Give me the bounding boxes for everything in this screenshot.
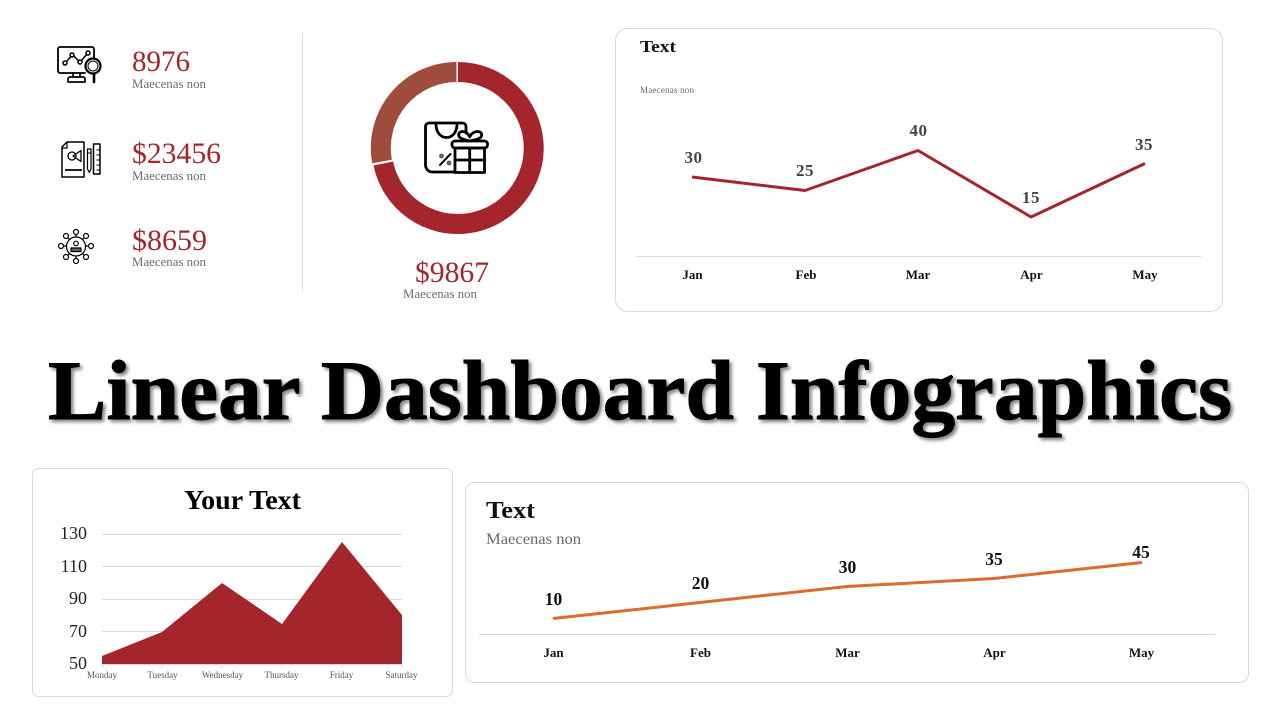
data labels: 20: [692, 573, 710, 593]
metric: $23456: Maecenas non: [132, 169, 207, 183]
x axis labels: Thursday: [264, 670, 299, 680]
month labels: [543, 645, 1155, 660]
heading: Text: [486, 498, 535, 524]
month labels: Mar: [835, 645, 860, 660]
card frame: [466, 482, 1248, 682]
data labels: [684, 121, 1153, 207]
data labels: 25: [796, 161, 814, 180]
donut ring: [381, 72, 534, 224]
month labels: Mar: [906, 267, 930, 282]
title: Linear Dashboard Infographics: [48, 344, 1232, 438]
data labels: 40: [910, 121, 928, 140]
data labels: 35: [985, 549, 1003, 569]
icon: monitor analytics: [58, 47, 100, 82]
month labels: May: [1132, 267, 1158, 282]
icon: document and ruler: [62, 142, 100, 177]
icon: people network: [58, 230, 94, 264]
x axis labels: Monday: [87, 670, 117, 680]
data labels: 35: [1135, 135, 1153, 154]
month labels: Feb: [690, 645, 711, 660]
x axis labels: [87, 670, 418, 680]
sub caption: Maecenas non: [486, 531, 581, 548]
y axis labels: 70: [69, 621, 87, 641]
y axis labels: 50: [69, 653, 87, 673]
metric: $8659: Maecenas non: [132, 255, 207, 269]
month labels: [682, 267, 1158, 282]
data labels: 30: [839, 557, 856, 577]
card frame: [616, 28, 1222, 312]
metric: $8659: $8659: [132, 224, 207, 257]
line series: [692, 150, 1145, 217]
metric: $23456: $23456: [132, 137, 221, 170]
month labels: Feb: [796, 267, 816, 282]
y axis labels: 130: [60, 523, 87, 543]
sub caption: Maecenas non: [640, 85, 694, 95]
divider: [302, 33, 304, 291]
month labels: Apr: [983, 645, 1006, 660]
month labels: Jan: [543, 645, 564, 660]
panel: bottom line chart: [466, 482, 1248, 682]
donut value: $9867: [415, 256, 489, 289]
card frame: [32, 468, 452, 696]
icon: shopping bag and gift: [426, 123, 488, 172]
panel: KPI list: [58, 45, 221, 269]
panel: top line chart: [616, 28, 1222, 312]
month labels: Jan: [682, 267, 703, 282]
data labels: 15: [1022, 188, 1040, 207]
panel: area chart: [32, 468, 452, 696]
line series: [553, 562, 1142, 618]
month labels: May: [1129, 645, 1155, 660]
x axis labels: Wednesday: [202, 670, 244, 680]
data labels: [545, 542, 1150, 609]
area series: [102, 542, 402, 664]
heading: Text: [640, 37, 676, 56]
heading: Your Text: [184, 485, 301, 515]
metric: 8976: [132, 45, 207, 91]
x axis labels: Saturday: [386, 670, 418, 680]
data labels: 10: [545, 589, 562, 609]
axis baseline: [636, 256, 1201, 258]
grid lines: [102, 534, 402, 668]
data labels: 30: [684, 148, 702, 167]
y axis labels: [60, 523, 87, 673]
data labels: 45: [1132, 542, 1150, 562]
y axis labels: 110: [61, 556, 87, 576]
metric: 8976: 8976: [132, 45, 190, 78]
y axis labels: 90: [69, 588, 87, 608]
x axis labels: Tuesday: [147, 670, 178, 680]
panel: donut chart: [381, 72, 534, 301]
month labels: Apr: [1020, 267, 1043, 282]
x axis labels: Friday: [330, 670, 354, 680]
metric: 8976: Maecenas non: [132, 77, 207, 91]
donut caption: Maecenas non: [403, 287, 478, 301]
axis baseline: [479, 634, 1215, 636]
